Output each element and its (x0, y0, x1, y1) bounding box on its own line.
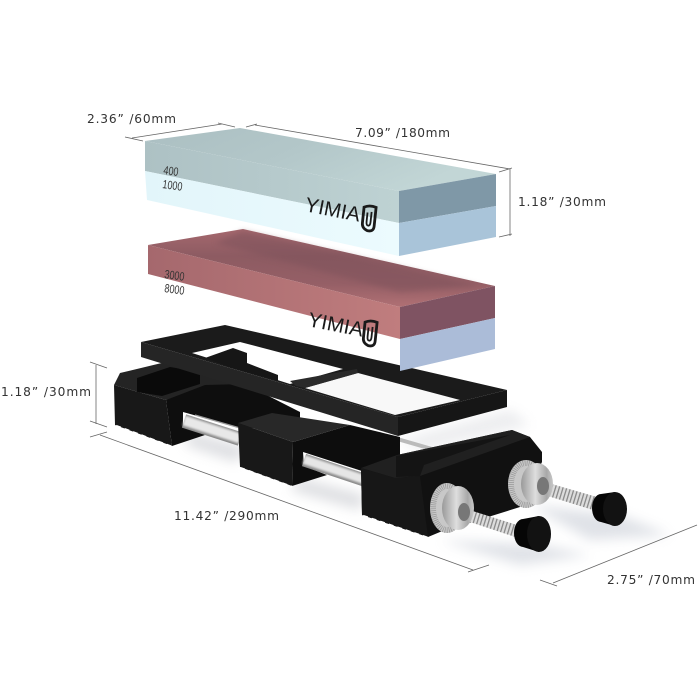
dimension: stone length (246, 124, 512, 172)
label: 7.09” /180mm (355, 126, 450, 140)
ground shadows (185, 410, 670, 565)
clamp notch (137, 367, 200, 396)
front upper layer (145, 141, 399, 223)
dimension: stone height (499, 169, 606, 237)
grit 400: 400 (163, 164, 179, 179)
guide rod rear strip, left (195, 415, 240, 428)
block: middle clamp (238, 413, 400, 487)
clamp top (114, 361, 245, 400)
end upper layer (400, 286, 495, 339)
block: left clamp (114, 361, 300, 447)
thread (458, 507, 517, 537)
brand logo (303, 193, 376, 231)
stone 400/1000 (145, 128, 496, 256)
label: 2.36” /60mm (87, 112, 176, 126)
dimension: stone width (87, 112, 235, 141)
end lower layer (399, 206, 496, 256)
grit 8000: 8000 (164, 282, 185, 298)
clamp top (238, 413, 350, 442)
grit 3000: 3000 (164, 268, 185, 284)
front lower layer (145, 171, 399, 256)
steel collar (442, 486, 474, 530)
clamp body (361, 430, 542, 537)
knurl texture (511, 463, 541, 505)
knurled head (508, 460, 544, 508)
brand logo (306, 308, 377, 346)
thread (538, 480, 597, 510)
block: front clamp (361, 430, 542, 538)
dimension: base width (540, 525, 697, 587)
frame long front side (141, 342, 398, 436)
end lower layer (400, 318, 495, 371)
guide rod left (184, 420, 240, 439)
stone 3000/8000 (148, 229, 495, 371)
clamp end face (238, 423, 293, 486)
clamp top (361, 430, 530, 478)
clamp top showing through the window (205, 348, 278, 381)
grit 1000: 1000 (162, 178, 183, 194)
neck (458, 503, 470, 521)
end upper layer (399, 174, 496, 223)
screw: rear (508, 460, 627, 526)
steel collar (521, 463, 553, 505)
label: 1.18” /30mm (1, 385, 91, 399)
cross bar (290, 369, 358, 388)
brand icon (363, 320, 377, 346)
clamp end face (114, 385, 172, 446)
brand icon (362, 205, 376, 231)
clamp side face (166, 384, 300, 446)
rubber cap (514, 516, 551, 552)
frame window left (192, 342, 343, 384)
clamp end face (361, 468, 428, 537)
label: 11.42” /290mm (174, 509, 279, 523)
rubber cap (592, 492, 627, 526)
knurl texture (433, 486, 461, 530)
front upper layer (148, 245, 400, 339)
knurled head (430, 483, 464, 533)
neck (537, 477, 549, 495)
label: 2.75” /70mm (607, 573, 695, 587)
top face (145, 128, 496, 191)
clamp teeth (240, 468, 292, 487)
brand text: YIMIA (306, 308, 366, 342)
screw: front (430, 483, 551, 552)
frame short side (398, 390, 507, 436)
label: 1.18” /30mm (518, 195, 606, 209)
brand text: YIMIA (303, 193, 363, 227)
top face (148, 229, 495, 307)
clamp side face (292, 425, 400, 486)
clamp notch (396, 435, 510, 477)
rear guide rod segment (380, 434, 432, 449)
dimension: base height (1, 362, 107, 427)
guide rod middle (304, 460, 364, 480)
sharpening frame (141, 325, 507, 436)
frame window right (305, 373, 460, 415)
dimension: base length (90, 432, 489, 572)
clamp teeth (116, 426, 172, 447)
frame top surface (141, 325, 507, 417)
top shadow (215, 231, 480, 292)
clamp teeth (363, 516, 428, 538)
